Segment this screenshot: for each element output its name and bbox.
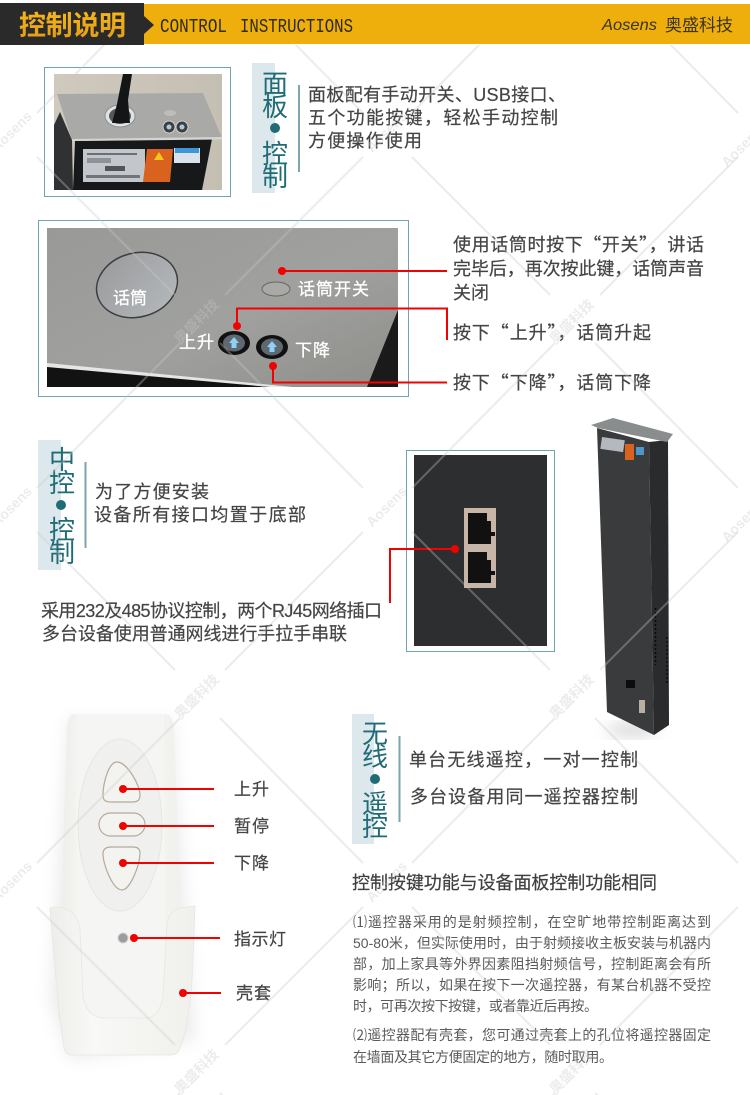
brand: [601, 16, 733, 35]
callout: indicator: [130, 930, 286, 949]
panel: device top photo: [44, 68, 230, 196]
panel 3 label: 中控控制: 制: [49, 538, 75, 568]
cradle: [50, 906, 195, 1055]
panel 4 label: 无线遥控: 控: [362, 812, 388, 842]
callout: rise: [119, 780, 269, 799]
callout: switch: [278, 267, 447, 275]
panel 1 text: 面板配有手动开关、USB接口、: [308, 85, 566, 105]
heading: remote notes: 控制按键功能与设备面板控制功能相同: [352, 873, 657, 893]
divider: [398, 736, 400, 822]
watermark text: Aosens: [363, 483, 410, 530]
subtitle: INSTRUCTIONS: [240, 16, 353, 38]
protocol text: 采用232及485协议控制，两个RJ45网络插口: [41, 601, 382, 621]
icon: microphone hole: [89, 243, 185, 327]
callout text: 按下“下降”，话筒下降: [453, 369, 651, 395]
watermark text: 奥盛科技: [171, 296, 222, 347]
watermark text: Aosens: [363, 108, 410, 155]
note paragraph 1: [353, 914, 711, 1014]
panel 1 label: 面板控制: 制: [262, 162, 288, 192]
icon: down button: 下降: [295, 341, 330, 360]
watermark text: 奥盛科技: [171, 671, 222, 722]
button oval: [78, 739, 162, 911]
note paragraph 1: 时，可再次按下按键，或者靠近后再按。: [353, 998, 598, 1014]
watermark text: Aosens: [363, 858, 410, 905]
icon: up button: [179, 331, 250, 355]
panel: button close-up photo: [38, 220, 408, 396]
callout: pause: [119, 817, 269, 836]
panel: RJ45 photo: [406, 450, 554, 652]
callout: case: [179, 984, 271, 1003]
panel 1 text: 方便操作使用: [308, 131, 422, 151]
panel 4 label: 无线遥控: 无: [362, 719, 388, 749]
panel 4 label: 无线遥控: [352, 714, 388, 844]
panel 3 text: [94, 482, 306, 525]
panel 3 label: 中控控制: 控: [49, 468, 75, 498]
remote control photo: [50, 714, 195, 1060]
note paragraph 1: 影响；所以，如果在按下一次遥控器，有某台机器不受控: [353, 977, 711, 994]
callout text: [453, 231, 704, 395]
note paragraph 2: ⑵遥控器配有壳套，您可通过壳套上的孔位将遥控器固定: [353, 1027, 711, 1043]
icon: switch: [262, 280, 369, 299]
callout: lower: [119, 854, 269, 873]
header bar: [0, 3, 750, 45]
divider: [298, 85, 300, 172]
panel 3 label: 中控控制: 控: [49, 515, 75, 545]
note paragraph 2: [353, 1027, 711, 1065]
down button: [103, 847, 140, 890]
protocol text: [41, 601, 382, 644]
panel 3 text: 设备所有接口均置于底部: [94, 505, 306, 525]
callout: pause: 暂停: [234, 817, 269, 836]
label sticker: [600, 437, 644, 460]
callout: indicator: 指示灯: [234, 930, 286, 949]
panel 1 text: 五个功能按键，轻松手动控制: [308, 108, 558, 128]
panel 1 label: 面板控制: 控: [262, 139, 288, 169]
note paragraph 1: ⑴遥控器采用的是射频控制，在空旷地带控制距离达到: [353, 914, 711, 930]
callout text: 按下“上升”，话筒升起: [453, 319, 651, 345]
panel 4 label: 无线遥控: 线: [362, 742, 388, 772]
icon: down button: [256, 335, 330, 360]
note paragraph 1: 50-80米，但实际使用时，由于射频接收主板安装与机器内: [353, 935, 711, 951]
callout: RJ45: [390, 545, 459, 603]
icon: gooseneck microphone: [105, 74, 135, 127]
note paragraph 1: 部，加上家具等外界因素阻挡射频信号，控制距离会有所: [353, 956, 711, 972]
panel 4 text: 单台无线遥控，一对一控制: [409, 750, 638, 770]
brand: Aosens: [601, 17, 657, 34]
panel 4 text: 多台设备用同一遥控器控制: [410, 787, 638, 807]
tall device photo: [591, 418, 673, 736]
watermark text: 奥盛科技: [546, 671, 597, 722]
panel 1 label: 面板控制: 面: [262, 69, 288, 99]
callout: lower: 下降: [234, 854, 269, 873]
subtitle: CONTROL: [160, 16, 227, 38]
panel 3 label: 中控控制: [38, 440, 75, 570]
icon: up button: 上升: [179, 333, 214, 352]
divider: [84, 462, 86, 548]
callout: rise: 上升: [234, 780, 269, 799]
panel 3 text: 为了方便安装: [95, 482, 209, 502]
panel 1 label: 面板控制: 板: [262, 92, 288, 122]
note paragraph 2: 在墙面及其它方便固定的地方，随时取用。: [353, 1049, 613, 1065]
remote body: [58, 714, 184, 1020]
pause button: [99, 813, 145, 836]
callout: up: [233, 308, 447, 340]
panel 1 label: 面板控制: [252, 63, 288, 193]
panel 4 text: [409, 750, 638, 807]
icon: RJ45 sockets: [464, 508, 496, 588]
callout text: 关闭: [453, 283, 489, 303]
watermark text: 奥盛科技: [546, 296, 597, 347]
icon: switch: 话筒开关: [298, 280, 369, 299]
subtitle: [160, 16, 353, 38]
icon: microphone hole: 话筒: [113, 289, 147, 308]
indicator lamp: [118, 933, 128, 943]
panel 1 text: [308, 85, 566, 151]
callout text: 完毕后，再次按此键，话筒声音: [453, 259, 704, 279]
callout: case: 壳套: [236, 984, 271, 1003]
up button: [103, 762, 140, 802]
panel 4 label: 无线遥控: 遥: [362, 789, 388, 819]
callout text: 使用话筒时按下“开关”，讲话: [453, 231, 704, 257]
title: 控制说明: [19, 11, 126, 41]
protocol text: 多台设备使用普通网线进行手拉手串联: [42, 624, 347, 644]
brand: 奥盛科技: [665, 16, 733, 35]
callout: down: [269, 362, 447, 382]
panel 3 label: 中控控制: 中: [49, 445, 75, 475]
